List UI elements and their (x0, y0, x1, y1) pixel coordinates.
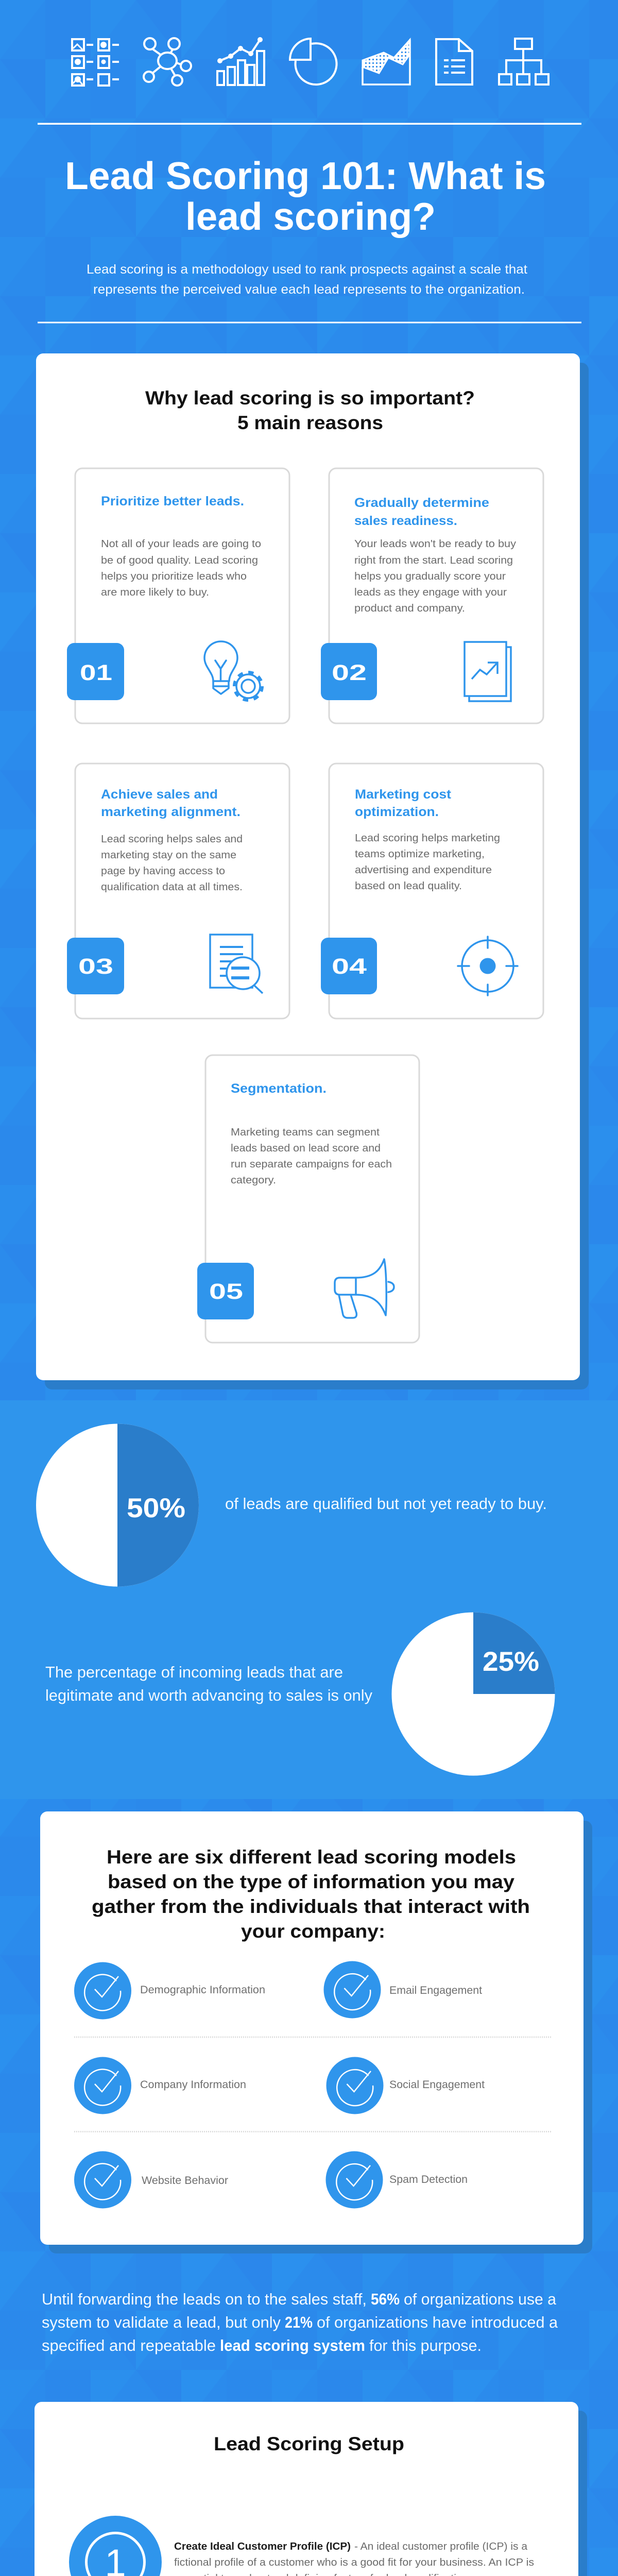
model: social engagement (327, 2057, 485, 2114)
reason card 04: 04 (332, 954, 367, 979)
model: company information (74, 2057, 246, 2114)
stat: 50 percent pie (36, 1424, 199, 1587)
reason card 03: Lead scoring helps sales and (101, 834, 243, 845)
model: demographic information (74, 1962, 265, 2020)
paragraph: validation statistics: system to validate a lead, but only (42, 2313, 281, 2331)
reason card 03: page by having access to (101, 866, 225, 877)
background: patterned blue header section (0, 0, 618, 1400)
model: demographic information: Demographic Information (140, 1984, 265, 1996)
model: spam detection: Spam Detection (389, 2174, 468, 2185)
divider (38, 321, 581, 324)
paragraph: validation statistics: lead scoring system (220, 2336, 365, 2354)
heading: six models: Here are six different lead scoring models (107, 1846, 516, 1868)
stat text: 25 percent: legitimate and worth advancing to sales is only (45, 1686, 372, 1704)
icon row (72, 38, 548, 86)
icon: light bulb and gear (204, 641, 262, 700)
heading: why lead scoring is important: Why lead scoring is so important? (145, 387, 475, 409)
heading: why lead scoring is important: 5 main reasons (237, 412, 383, 433)
reason card 02: sales readiness. (354, 514, 457, 528)
reason card 01: Not all of your leads are going to (101, 538, 261, 550)
paragraph: validation statistics: of organizations use a (404, 2290, 557, 2308)
reason card 05: category. (231, 1175, 276, 1186)
reason card 03: marketing stay on the same (101, 850, 236, 861)
panel: lead scoring setup (35, 2402, 587, 2576)
reason card 02: helps you gradually score your (354, 571, 506, 582)
step 1: fictional profile of a customer who is a good fit for your business. An ICP is (174, 2557, 534, 2568)
intro text: represents the perceived value each lead represents to the organization. (93, 282, 525, 297)
title: Lead Scoring 101: What is (65, 154, 546, 197)
paragraph: validation statistics: for this purpose. (369, 2336, 482, 2354)
reason card 05: Marketing teams can segment (231, 1127, 380, 1138)
model: website behavior (74, 2151, 228, 2208)
reason card 04 (321, 764, 543, 1019)
reason card 02: 02 (332, 660, 367, 685)
icon: megaphone (335, 1259, 394, 1318)
icon: area chart (363, 40, 410, 84)
panel: five reasons (36, 353, 589, 1389)
model: email engagement (323, 1961, 482, 2019)
paragraph: validation statistics: 56% (371, 2290, 400, 2308)
step 1: - An ideal customer profile (ICP) is a (354, 2541, 528, 2552)
paragraph: validation statistics (42, 2290, 558, 2354)
stat text: 25 percent (45, 1663, 372, 1704)
paragraph: validation statistics: Until forwarding the leads on to the sales staff, (42, 2290, 367, 2308)
background: flat blue stats section (0, 1400, 618, 1799)
reason card 05: Segmentation. (231, 1081, 327, 1096)
reason card 01: are more likely to buy. (101, 587, 209, 598)
reason card 03: marketing alignment. (101, 805, 241, 819)
reason card 01: 01 (80, 660, 112, 685)
reason card 02: Your leads won't be ready to buy (354, 538, 516, 550)
reason card 02: right from the start. Lead scoring (354, 555, 513, 566)
icon: image list (72, 39, 119, 86)
intro text (87, 262, 527, 297)
model: website behavior: Website Behavior (142, 2175, 228, 2187)
stat text: 50 percent: of leads are qualified but not yet ready to buy. (225, 1495, 547, 1513)
reason card 04: Lead scoring helps marketing (355, 833, 500, 844)
reason card 05: run separate campaigns for each (231, 1159, 392, 1170)
reason card 02: Gradually determine (354, 496, 489, 510)
reason card 05: 05 (209, 1279, 243, 1304)
reason card 04: Marketing cost (355, 787, 452, 802)
reason card 04: optimization. (355, 805, 439, 819)
paragraph: validation statistics: 21% (285, 2313, 313, 2331)
reason card 01 (67, 468, 289, 723)
paragraph: validation statistics: of organizations have introduced a (317, 2313, 558, 2331)
stat: 25 percent pie: 25% (483, 1647, 539, 1677)
heading: lead scoring setup: Lead Scoring Setup (214, 2433, 404, 2454)
icon: report with rising arrow (465, 642, 511, 701)
icon: organization chart (499, 39, 548, 84)
reason card 05 (197, 1055, 419, 1343)
model: spam detection (325, 2151, 468, 2208)
model: social engagement: Social Engagement (389, 2079, 485, 2091)
title: lead scoring? (185, 195, 436, 238)
background: patterned blue middle section (0, 1799, 618, 2576)
step 1: Create Ideal Customer Profile (ICP) (174, 2541, 351, 2552)
icon: bar and line chart (217, 38, 264, 85)
stat text: 25 percent: The percentage of incoming leads that are (45, 1663, 343, 1681)
title (65, 154, 546, 238)
panel: six lead scoring models (40, 1811, 592, 2253)
heading: six models (92, 1846, 530, 1942)
model: company information: Company Information (140, 2079, 246, 2091)
paragraph: validation statistics: specified and repeatable (42, 2336, 216, 2354)
reason card 04: based on lead quality. (355, 880, 462, 892)
icon: document with magnifier (210, 935, 263, 993)
heading: why lead scoring is important (145, 387, 475, 433)
stat: 50 percent pie: 50% (127, 1493, 185, 1523)
icon: document (436, 39, 472, 84)
reason card 01: be of good quality. Lead scoring (101, 555, 258, 566)
reason card 03: 03 (78, 954, 113, 979)
model: email engagement: Email Engagement (389, 1985, 482, 1996)
reason card 05: leads based on lead score and (231, 1143, 381, 1154)
reason card 04: teams optimize marketing, (355, 849, 485, 860)
reason card 04: advertising and expenditure (355, 865, 492, 876)
divider (38, 123, 581, 125)
step 1 (69, 2516, 534, 2576)
icon: pie chart (290, 39, 337, 84)
reason card 03 (67, 764, 289, 1019)
icon: target (458, 937, 518, 995)
reason card 01: Prioritize better leads. (101, 494, 244, 509)
heading: six models: your company: (241, 1921, 385, 1942)
heading: six models: based on the type of information you may (108, 1871, 514, 1892)
reason card 01: helps you prioritize leads who (101, 571, 247, 582)
stat: 25 percent pie (391, 1613, 555, 1775)
heading: six models: gather from the individuals that interact with (92, 1896, 530, 1917)
reason card 02 (321, 468, 543, 723)
reason card 02: product and company. (354, 603, 465, 614)
icon: network (144, 38, 191, 86)
reason card 03: qualification data at all times. (101, 882, 243, 893)
intro text: Lead scoring is a methodology used to rank prospects against a scale that (87, 262, 527, 277)
reason card 03: Achieve sales and (101, 787, 218, 802)
reason card 02: leads as they engage with your (354, 587, 507, 598)
